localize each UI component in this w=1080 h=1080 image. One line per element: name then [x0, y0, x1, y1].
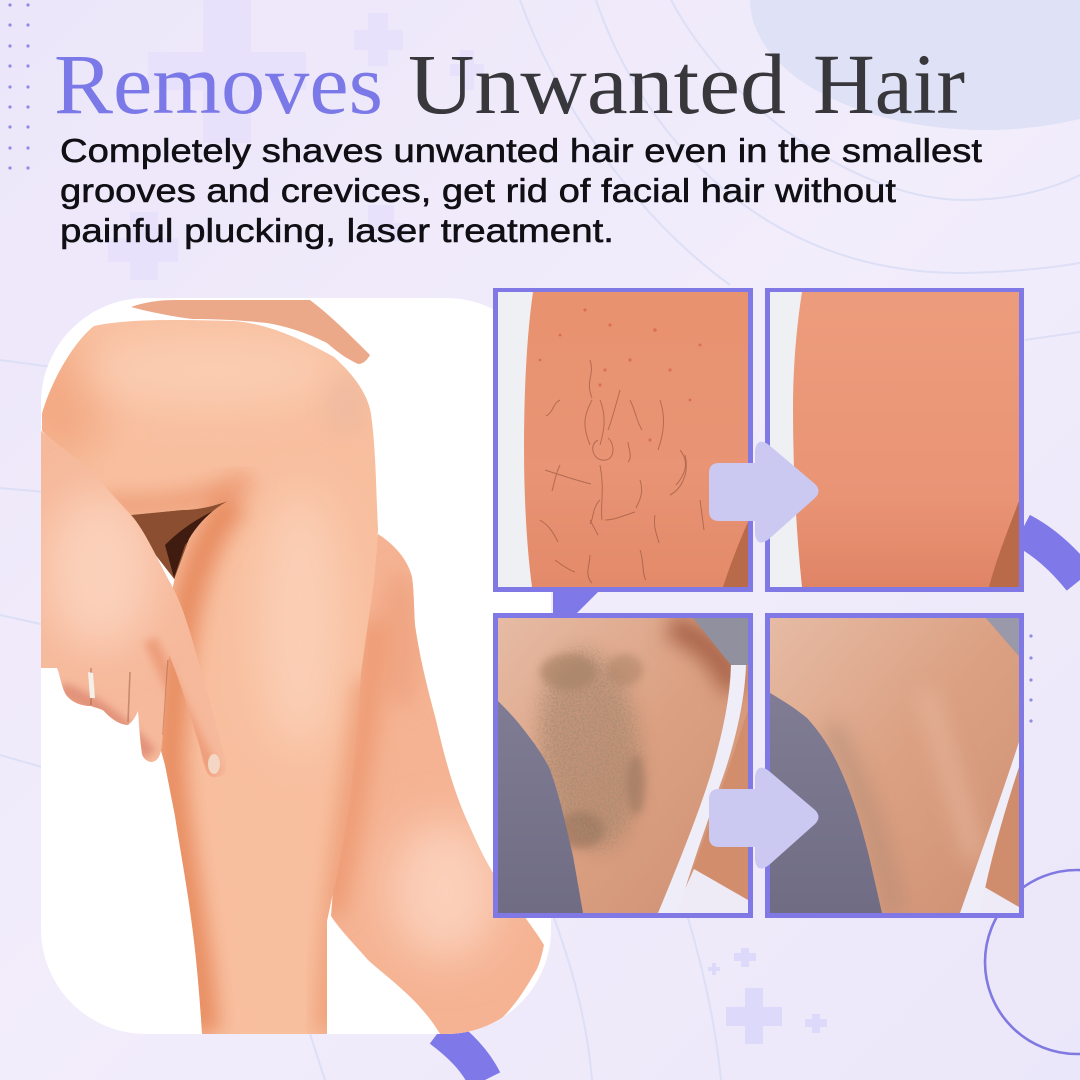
panel: legs photo [15, 298, 560, 1040]
outline circle [985, 870, 1080, 1054]
description text: grooves and crevices, get rid of facial hair without [60, 173, 897, 210]
purple arc bottom [440, 1030, 485, 1080]
panel: after underarm [765, 613, 1024, 918]
title: Hair [813, 36, 965, 132]
ring [88, 672, 95, 698]
panel: before leg skin [493, 288, 753, 592]
title [54, 36, 965, 132]
arrow: top [709, 442, 818, 543]
description text: Completely shaves unwanted hair even in the smallest [60, 133, 983, 170]
hand on top of knee [131, 300, 370, 364]
panel: after leg skin [765, 288, 1024, 592]
decorative dots left [8, 3, 30, 170]
purple arc right [1022, 530, 1080, 580]
decorative plus signs [108, 0, 484, 280]
decorative dots right [1029, 634, 1033, 723]
front leg and thigh [42, 320, 378, 1034]
arm and hand [41, 431, 224, 778]
small plus signs bottom [708, 948, 827, 1044]
crease shadow [130, 501, 228, 580]
description text [60, 133, 983, 250]
connector piece [553, 590, 600, 614]
panel: before underarm [493, 613, 753, 918]
description text: painful plucking, laser treatment. [60, 213, 614, 250]
title: Unwanted [408, 36, 786, 132]
arrow: bottom [709, 768, 818, 869]
decorative corner circle [750, 0, 1080, 130]
fingernail [208, 754, 220, 774]
back leg [331, 534, 544, 1034]
title: Removes [54, 36, 383, 132]
